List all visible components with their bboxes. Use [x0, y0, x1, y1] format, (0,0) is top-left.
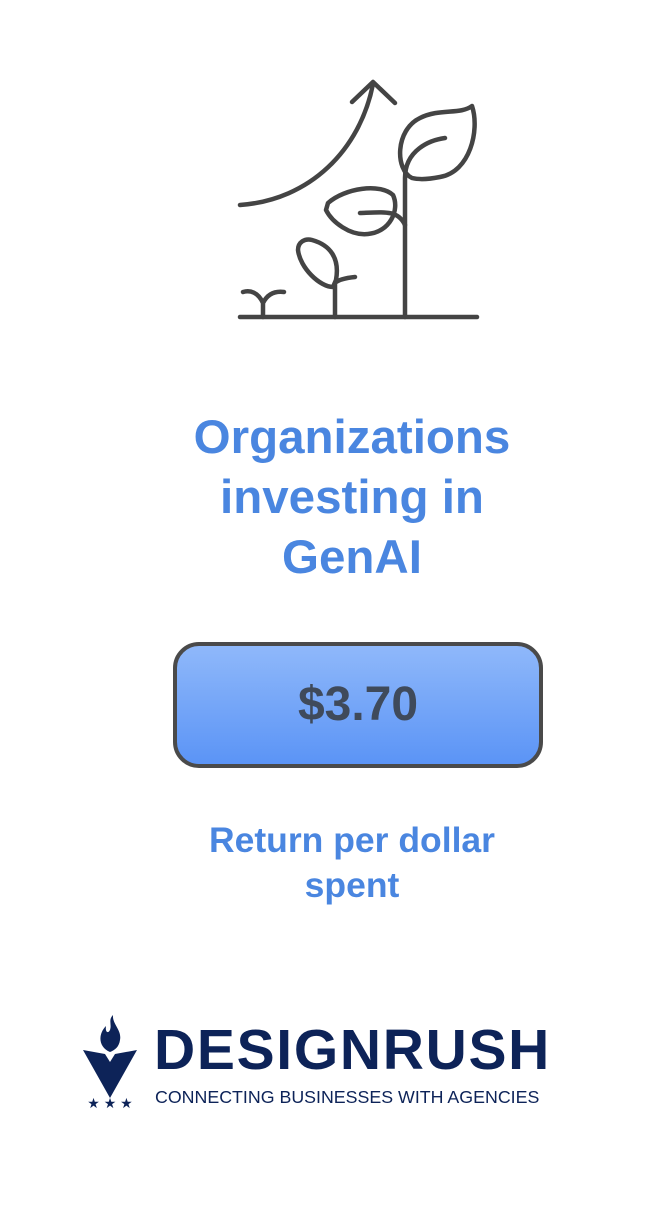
title: GenAI	[282, 531, 422, 584]
title: investing in	[220, 471, 484, 524]
value box: $3.70	[298, 678, 418, 731]
tagline: CONNECTING BUSINESSES WITH AGENCIES	[155, 1087, 539, 1107]
title: Organizations	[194, 411, 510, 464]
icon: logo mark: ★ ★ ★	[87, 1095, 133, 1111]
logo: DesignRush	[83, 1015, 551, 1111]
subtitle: Return per dollar	[209, 820, 495, 860]
value box	[173, 642, 543, 768]
subtitle: spent	[305, 865, 399, 905]
title	[194, 411, 510, 584]
subtitle	[209, 820, 495, 905]
icon: logo mark	[83, 1015, 137, 1111]
logo text: DESIGNRUSH	[154, 1018, 551, 1082]
icon: growing plants with rising arrow	[238, 80, 480, 320]
